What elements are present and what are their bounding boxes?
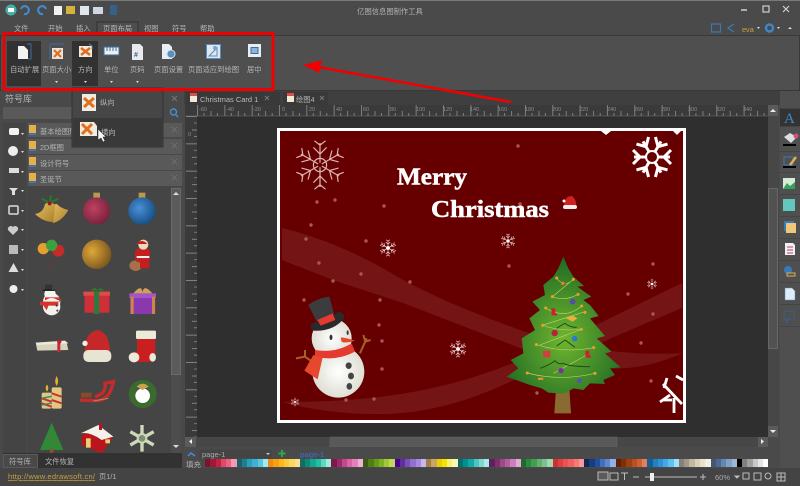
icon: layers bbox=[784, 221, 796, 233]
Christmas card page bbox=[277, 128, 686, 423]
snow dots bbox=[302, 144, 655, 402]
horizontal ruler: 180 bbox=[525, 107, 534, 113]
menu tabs: 页面布局 bbox=[103, 24, 132, 33]
horizontal ruler: -40 bbox=[226, 107, 234, 113]
symbol: sleigh bbox=[80, 382, 113, 401]
shade lines bbox=[540, 323, 590, 368]
horizontal ruler: 300 bbox=[688, 107, 697, 113]
Christmas tree bbox=[507, 257, 621, 413]
ribbon labels: 页码 bbox=[130, 65, 145, 74]
icon: hyperlink bbox=[784, 266, 795, 276]
symbol: red gift lower bbox=[85, 300, 109, 314]
background swoosh lower bbox=[282, 283, 682, 414]
drop-down orientation menu bbox=[72, 88, 163, 147]
symbol: santa bbox=[129, 240, 150, 271]
icon: units bbox=[104, 47, 119, 55]
sidebar heading: 符号库 bbox=[5, 93, 32, 104]
small santa hat bbox=[562, 196, 577, 209]
foliage bbox=[507, 257, 621, 393]
snowman body bbox=[312, 346, 364, 398]
page tabs row bbox=[184, 447, 780, 459]
dropdown carets bbox=[55, 81, 139, 83]
category rows: 圣诞节 bbox=[40, 175, 62, 184]
category rows: 设计符号 bbox=[40, 159, 69, 168]
symbol scrollbar bbox=[171, 188, 181, 453]
zoom percent: 60% bbox=[715, 473, 730, 482]
symbol: santa hat bbox=[82, 330, 111, 362]
snowman bbox=[296, 297, 371, 398]
tab: drawing 4: 绘图4 bbox=[296, 95, 315, 104]
icon: center bbox=[248, 44, 261, 57]
icon: page setup bbox=[162, 44, 175, 59]
buttons bbox=[346, 362, 354, 390]
horizontal ruler bbox=[185, 105, 768, 116]
menu item: landscape: 横向 bbox=[101, 128, 116, 137]
small snowflakes bbox=[291, 234, 657, 406]
heading: Merry: Merry bbox=[397, 164, 467, 190]
account tools bbox=[712, 24, 792, 34]
red highlight box bbox=[4, 34, 273, 90]
horizontal ruler: 220 bbox=[579, 107, 588, 113]
ribbon labels: 页面适应到绘图 bbox=[188, 65, 239, 74]
add page button bbox=[278, 450, 286, 457]
ribbon labels: 方向 bbox=[78, 65, 93, 74]
tab: Christmas Card 1: Christmas Card 1 bbox=[200, 95, 258, 104]
page tabs row: page-1 bbox=[202, 450, 225, 459]
sidebar bottom tabs: 符号库 bbox=[9, 457, 31, 466]
icon: auto expand bbox=[18, 44, 31, 59]
account tools: eva bbox=[742, 25, 755, 34]
vertical scrollbar bbox=[768, 105, 779, 437]
menu tabs bbox=[14, 22, 215, 35]
canvas area bbox=[185, 105, 768, 437]
horizontal ruler: 200 bbox=[552, 107, 561, 113]
app logo bbox=[6, 4, 16, 16]
window controls bbox=[741, 6, 789, 12]
category rows bbox=[28, 123, 182, 186]
menu tabs: 文件 bbox=[14, 24, 29, 33]
horizontal ruler: 260 bbox=[634, 107, 643, 113]
scarf bbox=[304, 343, 355, 379]
garlands bbox=[527, 278, 595, 377]
status bar bbox=[0, 468, 800, 486]
symbol: balloons bbox=[38, 240, 64, 270]
icon: line bbox=[783, 157, 796, 168]
symbol: small tree bbox=[40, 423, 63, 453]
fill colour palette bbox=[205, 459, 768, 467]
symbols: Christmas gallery bbox=[35, 193, 156, 310]
menu tabs: 符号 bbox=[172, 24, 187, 33]
tab: Christmas Card 1 bbox=[190, 93, 269, 104]
left sidebar bbox=[0, 91, 184, 468]
zoom slider bbox=[633, 473, 706, 481]
horizontal ruler: -60 bbox=[199, 107, 207, 113]
horizontal ruler: 0 bbox=[282, 107, 285, 113]
corner snowflake top right bbox=[633, 137, 671, 177]
horizontal ruler: 60 bbox=[363, 107, 369, 113]
zoom tools bbox=[735, 473, 785, 481]
symbol: red ball bbox=[83, 193, 110, 225]
icon: page size bbox=[50, 44, 64, 59]
ribbon panel bbox=[0, 36, 800, 90]
symbol: red house bbox=[81, 423, 113, 453]
horizontal ruler: 340 bbox=[743, 107, 752, 113]
horizontal ruler: 320 bbox=[716, 107, 725, 113]
icon: text: A bbox=[784, 111, 795, 127]
vertical ruler bbox=[185, 116, 197, 437]
right tool panel bbox=[780, 91, 800, 486]
icon: shape fill bbox=[783, 199, 795, 211]
icon: page number bbox=[132, 44, 143, 60]
title bar bbox=[0, 0, 800, 16]
icon: fit page to drawing bbox=[206, 44, 220, 58]
ribbon labels: 居中 bbox=[247, 65, 262, 74]
partial snowflake top bbox=[601, 131, 681, 135]
page count: 页1/1 bbox=[99, 472, 116, 481]
heading: Christmas: Christmas bbox=[431, 197, 549, 223]
horizontal ruler: 140 bbox=[470, 107, 479, 113]
symbol: gold ball bbox=[82, 240, 111, 269]
snowman head bbox=[312, 318, 352, 358]
document tab strip bbox=[0, 91, 780, 105]
ribbon labels: 自动扩展 bbox=[10, 65, 39, 74]
horizontal scrollbar bbox=[185, 437, 768, 447]
symbol: snowflake bbox=[130, 425, 154, 452]
horizontal ruler: 20 bbox=[309, 107, 315, 113]
icon: image bbox=[783, 178, 795, 189]
ribbon buttons bbox=[7, 41, 262, 86]
menu tabs: 开始 bbox=[48, 24, 63, 33]
hat bbox=[308, 297, 344, 331]
quick access toolbar bbox=[21, 5, 117, 15]
red arrow bbox=[303, 60, 511, 102]
website link: http://www.edrawsoft.cn/ bbox=[8, 472, 96, 481]
symbol: blue ball bbox=[128, 193, 156, 225]
snowman arms bbox=[296, 335, 371, 368]
title: 亿图信息图制作工具 bbox=[357, 7, 424, 16]
horizontal ruler: -20 bbox=[253, 107, 261, 113]
sidebar bottom tabs bbox=[3, 453, 182, 468]
page tabs row: page-1 bbox=[300, 450, 324, 459]
horizontal ruler: 100 bbox=[416, 107, 425, 113]
large outlined snowflake bbox=[296, 141, 344, 189]
trunk bbox=[554, 388, 571, 413]
corner snowflake bottom right bbox=[660, 376, 683, 413]
icon: comment bbox=[784, 311, 794, 322]
symbol: parcel bbox=[36, 340, 68, 352]
symbol: wreath bbox=[132, 383, 153, 405]
ribbon labels: 页面大小 bbox=[42, 65, 72, 74]
sidebar bottom tabs: 文件恢复 bbox=[45, 457, 75, 466]
symbol: stocking bbox=[129, 331, 156, 362]
page background bbox=[280, 131, 683, 420]
symbol: purple gift lower bbox=[130, 300, 155, 314]
icon: note bbox=[785, 288, 795, 300]
ornaments bbox=[526, 276, 596, 383]
symbol: candles bbox=[42, 376, 62, 409]
icon: fill bbox=[783, 133, 798, 146]
horizontal ruler: 40 bbox=[336, 107, 342, 113]
ribbon labels bbox=[10, 65, 262, 74]
menu tabs: 视图 bbox=[144, 24, 159, 33]
tab: drawing 4 bbox=[287, 93, 324, 104]
category rows: 基本绘图形状 bbox=[40, 127, 84, 136]
horizontal ruler: 120 bbox=[443, 107, 452, 113]
background swoosh upper bbox=[282, 228, 683, 369]
menu tabs: 帮助 bbox=[200, 24, 215, 33]
ribbon labels: 单位 bbox=[104, 65, 119, 74]
vertical ruler: 0 bbox=[188, 132, 191, 138]
horizontal ruler: 280 bbox=[661, 107, 670, 113]
menu tabs: 插入 bbox=[76, 24, 91, 33]
page border bbox=[277, 128, 686, 423]
symbol: snowman lower bbox=[40, 298, 60, 315]
eyes and nose bbox=[329, 330, 355, 342]
icon: document list bbox=[785, 243, 795, 255]
search box bbox=[3, 107, 178, 119]
symbol: red gift bbox=[83, 288, 110, 310]
view mode icons bbox=[598, 472, 628, 480]
category icon column bbox=[3, 123, 26, 453]
symbol: purple gift bbox=[129, 288, 156, 310]
horizontal ruler: 240 bbox=[607, 107, 616, 113]
symbol: snowman bbox=[40, 285, 62, 310]
symbol: bells bbox=[35, 195, 68, 223]
category rows: 2D框图 bbox=[40, 143, 64, 152]
horizontal ruler: 160 bbox=[498, 107, 507, 113]
fill palette label: 填充 bbox=[186, 459, 201, 469]
horizontal ruler: 80 bbox=[390, 107, 396, 113]
ribbon labels: 页面设置 bbox=[154, 65, 183, 74]
icon: page number: # bbox=[134, 52, 138, 59]
mouse cursor bbox=[98, 129, 106, 142]
menu item: portrait: 纵向 bbox=[100, 98, 115, 107]
icon: orientation bbox=[79, 44, 92, 57]
